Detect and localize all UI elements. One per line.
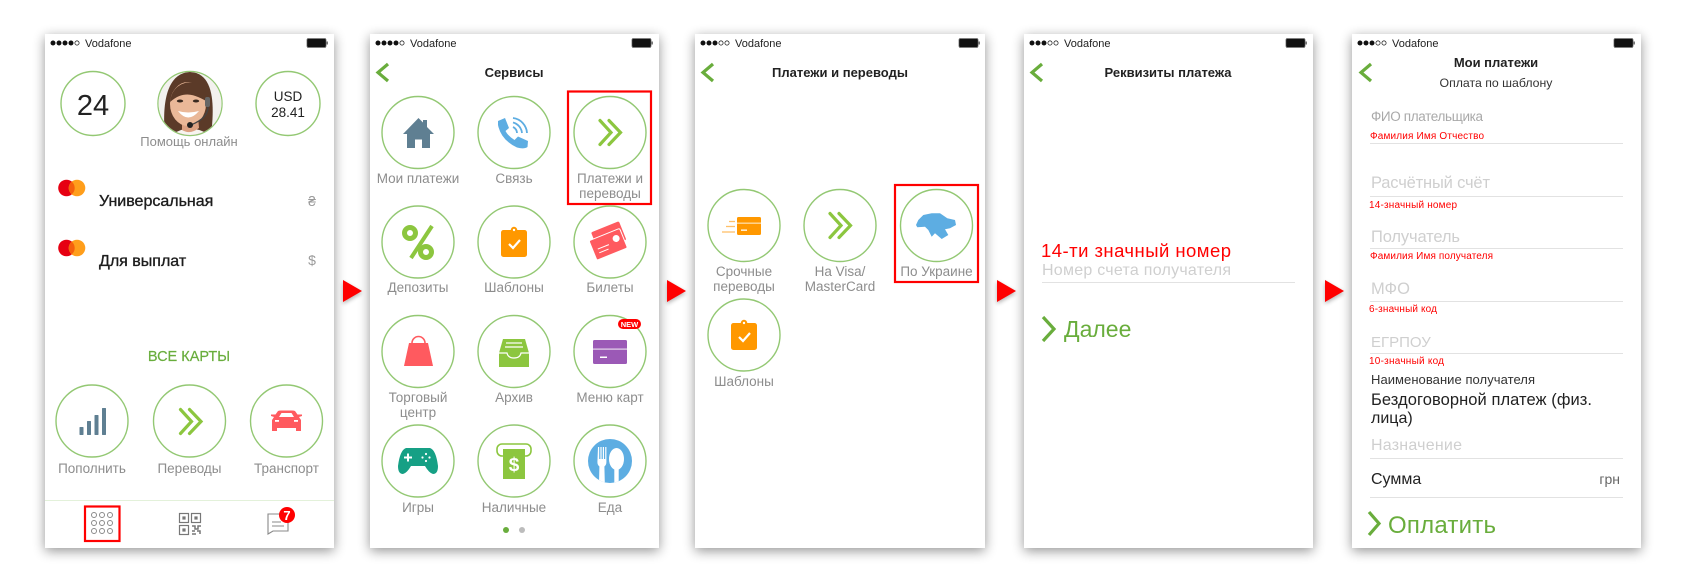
arrow 1 [343,280,362,304]
arrow 3 [997,280,1016,304]
status bar: Vodafone [735,38,782,50]
service: food [574,425,646,515]
status bar [376,38,653,50]
field: EGRPOU [1369,334,1623,367]
pagination dots [503,527,525,533]
button: transfers: Переводы [157,461,222,476]
service: payments and transfers [574,96,646,201]
avatar: online help [158,72,222,136]
service: archive [478,316,550,405]
option: to Visa/MasterCard: На Visa/ [815,264,866,279]
card row: universal: ₴ [308,193,316,209]
service: food: Еда [598,500,623,515]
back chevron [1361,64,1371,81]
new badge: NEW [621,320,639,329]
service: my payments: Мои платежи [377,171,459,186]
field: recipient name: Наименование получателя [1371,372,1535,387]
status bar: Vodafone [1392,38,1438,50]
back chevron [378,64,388,81]
arrow 4 [1325,280,1344,304]
currency circle: 28.41 [271,105,305,120]
nav icon: QR code [180,514,201,534]
option: urgent transfers: переводы [713,279,775,294]
account placeholder: Номер счета получателя [1042,262,1231,279]
service: tickets: Билеты [586,280,634,295]
account hint: 14-ти значный номер [1041,240,1231,261]
field: account [1369,174,1623,211]
service: tickets [574,206,646,295]
currency circle [256,72,320,136]
field: EGRPOU: 10-значный код [1369,356,1444,367]
service: games: Игры [402,500,434,515]
service: archive: Архив [495,390,533,405]
screen 3: payments and transfers [695,34,985,551]
service: games [382,425,454,515]
button: transport: Транспорт [254,461,319,476]
status bar: Vodafone [85,38,132,50]
pay button: Оплатить [1388,512,1496,539]
title: Мои платежи [1454,55,1538,70]
subtitle: Оплата по шаблону [1440,76,1553,90]
status bar [700,38,980,50]
field: recipient: Получатель [1371,228,1460,246]
status bar: Vodafone [410,38,456,50]
option: urgent transfers: Срочные [716,264,772,279]
option: templates [708,299,780,389]
service: my payments [377,96,459,186]
field: payer name: ФИО плательщика [1371,109,1483,124]
arrow 2 [667,280,686,304]
status bar [1030,38,1307,50]
status bar: Vodafone [1064,38,1110,50]
field: EGRPOU: ЕГРПОУ [1371,334,1431,351]
service: deposits [382,206,454,295]
nav icon: menu with highlight [85,506,120,541]
field: purpose: Назначение [1371,437,1462,454]
service: deposits: Депозиты [388,280,448,295]
service: communications: Связь [495,171,533,186]
card row: universal [58,180,316,210]
card row: payouts: Для выплат [99,253,187,270]
field: recipient [1370,228,1623,262]
status bar [50,38,328,50]
card row: universal: Универсальная [99,193,213,210]
back chevron [1032,64,1042,81]
field: recipient name: Бездоговорной платеж (физ. [1371,391,1592,409]
currency circle: USD [274,89,302,104]
date circle: 24 [77,90,109,122]
date circle [61,72,125,136]
button: top up [56,385,128,476]
service: templates: Шаблоны [484,280,544,295]
field: MFO: 6-значный код [1369,304,1437,315]
service: shopping centre: центр [400,405,436,420]
card row: payouts: $ [308,252,316,268]
service: cash [478,425,550,515]
nav icon: messages with badge [268,507,295,534]
back chevron [703,64,713,81]
screen 1: main screen [45,34,334,551]
service: shopping centre: Торговый [389,390,447,405]
screen 2: services [370,34,659,551]
option: within Ukraine: По Украине [900,264,973,279]
field: MFO: МФО [1371,280,1410,298]
button: transport [250,385,322,476]
title: Реквизиты платежа [1105,65,1232,80]
service: payments and transfers: переводы [579,186,641,201]
field: account: Расчётный счёт [1371,174,1490,192]
highlight box [895,185,978,282]
option: within Ukraine [900,190,973,279]
service: communications [478,96,550,186]
option: templates: Шаблоны [714,374,774,389]
status bar [1358,38,1635,50]
field: amount [1370,471,1623,498]
button: top up: Пополнить [58,461,126,476]
service: card menu [574,316,646,405]
all cards link: ВСЕ КАРТЫ [148,349,230,365]
highlight box [568,92,651,204]
field: MFO [1369,280,1623,315]
screen 4: payment details [1024,34,1313,551]
service: card menu: Меню карт [576,390,644,405]
service: shopping centre [382,316,454,420]
service: templates [478,206,550,295]
option: urgent transfers [708,190,780,294]
field: account: 14-значный номер [1369,200,1457,211]
service: cash: Наличные [482,500,546,515]
option: to Visa/MasterCard [804,190,876,294]
field: payer name: Фамилия Имя Отчество [1370,131,1484,142]
screen 5: template payment form [1352,34,1641,551]
service: cash: $ [509,455,520,476]
option: to Visa/MasterCard: MasterCard [805,279,875,294]
nav icon: messages with badge: 7 [283,508,291,523]
service: payments and transfers: Платежи и [577,171,643,186]
card row: payouts [58,240,316,270]
button: transfers [154,385,226,476]
next button: Далее [1064,316,1131,342]
title: Сервисы [485,65,543,80]
title: Платежи и переводы [772,65,908,80]
field: amount: грн [1599,471,1620,487]
field: payer name [1370,109,1623,144]
field: recipient name [1371,372,1592,427]
field: amount: Сумма [1371,471,1421,488]
field: recipient: Фамилия Имя получателя [1370,251,1493,262]
field: recipient name: лица) [1371,410,1413,427]
avatar caption: Помощь онлайн [140,134,238,149]
